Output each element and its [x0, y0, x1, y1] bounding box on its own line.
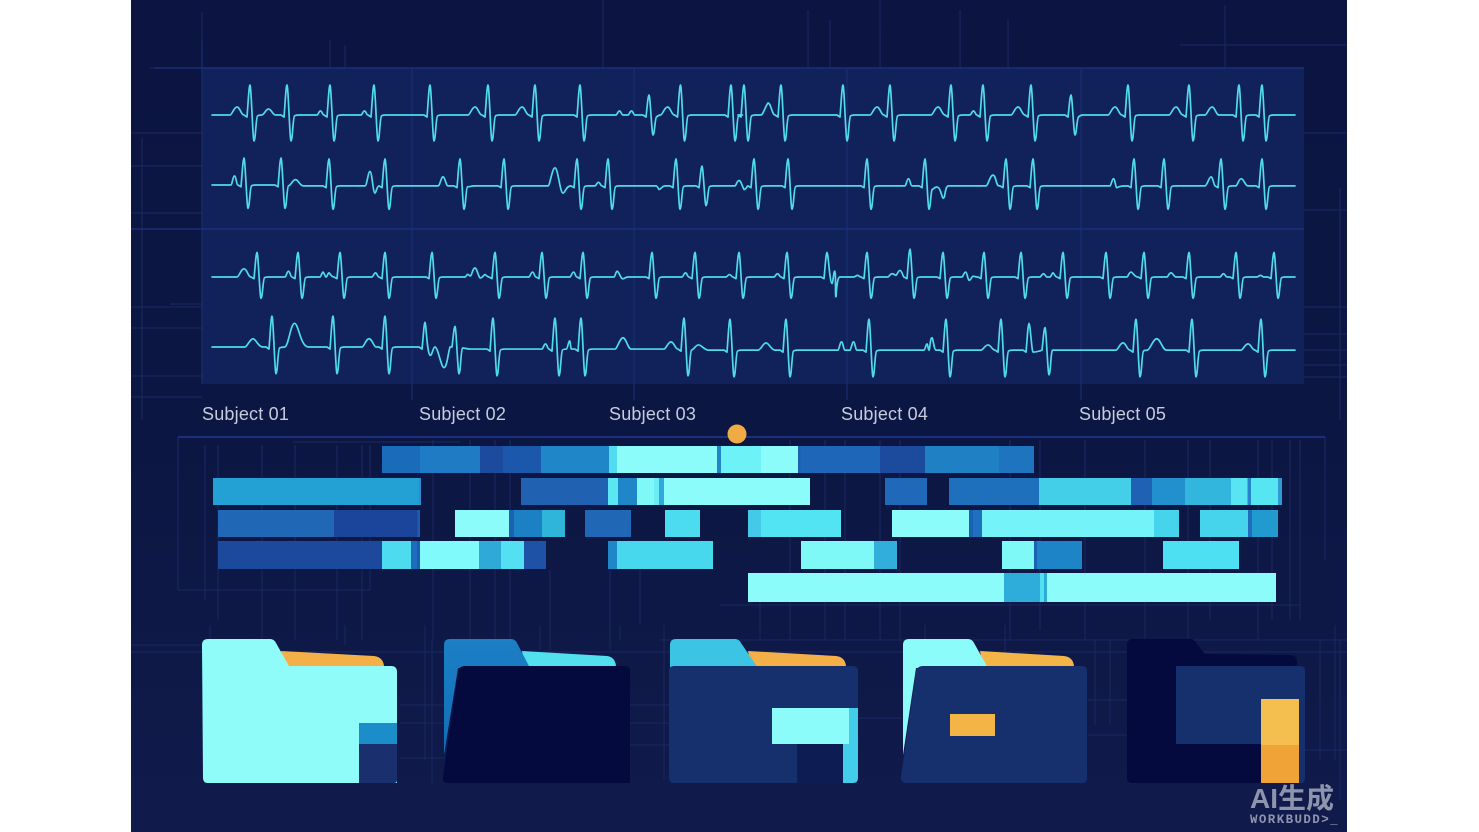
bar row 5: [748, 573, 1276, 602]
ECG trace row 1: [212, 85, 1295, 141]
bar row 2: [213, 478, 1282, 505]
label: Subject 01: Subject 01: [202, 404, 289, 424]
label: Subject 05: Subject 05: [1079, 404, 1166, 424]
label: Subject 04: Subject 04: [841, 404, 928, 424]
watermark: [1250, 783, 1339, 827]
watermark: WORKBUDD>_: [1250, 813, 1339, 827]
segment bars chart: [213, 446, 1282, 602]
bar row 3: [218, 510, 1278, 537]
label: Subject 02: Subject 02: [419, 404, 506, 424]
ECG trace row 2: [212, 158, 1295, 209]
ECG trace row 4: [212, 316, 1295, 377]
subject labels: [202, 404, 1166, 424]
icon: folder 3: [669, 639, 858, 783]
icon: folder 1: [202, 639, 397, 783]
timeline marker dot: [728, 424, 746, 444]
background circuit grid: [131, 0, 1347, 800]
bar row 4: [218, 541, 1239, 569]
panel: ECG traces: [131, 40, 1304, 400]
icon: folder 4: [901, 639, 1087, 783]
label: Subject 03: Subject 03: [609, 404, 696, 424]
bar row 1: [382, 446, 1034, 473]
icon: folder 5: [1127, 639, 1305, 783]
icon: folder 2: [443, 639, 630, 783]
timeline axis line: [178, 436, 1325, 438]
watermark: AI生成: [1250, 783, 1334, 814]
ECG trace row 3: [212, 249, 1295, 298]
